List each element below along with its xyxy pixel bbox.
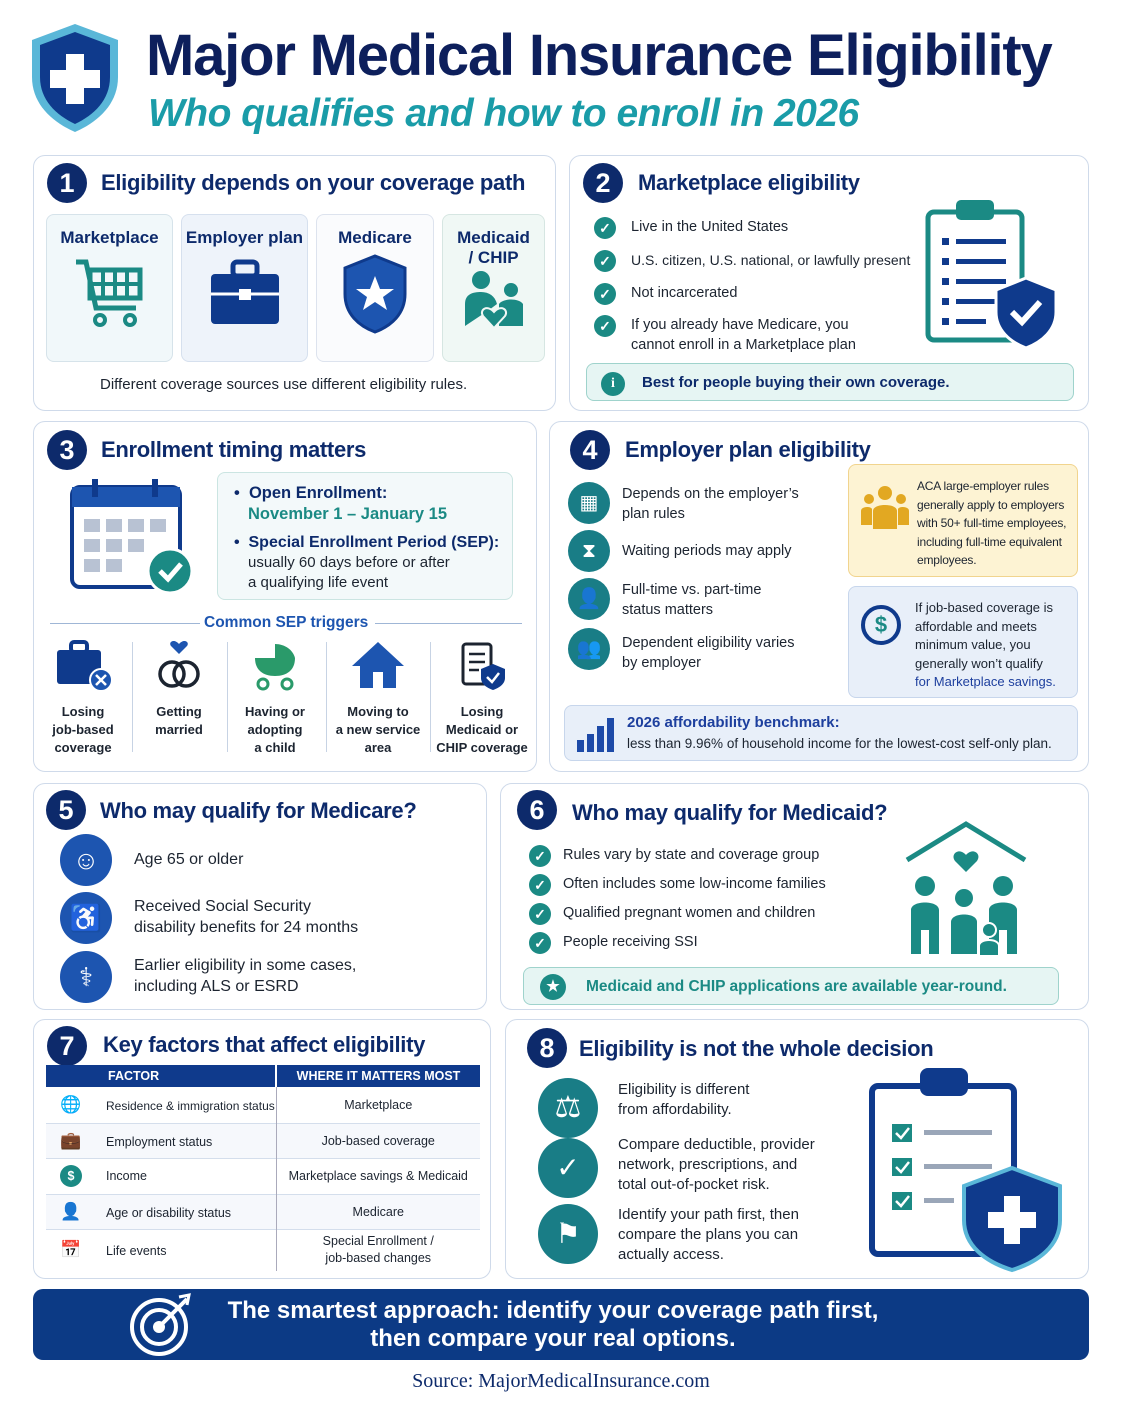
decision list: total out-of-pocket risk. <box>618 1176 770 1193</box>
callout: ACA large-employer: with 50+ full-time employees, <box>917 516 1066 530</box>
medicare list: ☺ <box>73 845 99 875</box>
card: marketplace: Marketplace <box>60 228 159 247</box>
factors table: Income <box>106 1169 147 1183</box>
SEP triggers row: a child <box>254 740 296 755</box>
factors table: Special Enrollment / <box>323 1234 434 1248</box>
panel 5: Who may qualify for Medicare? <box>100 798 416 823</box>
medicaid checklist: ✓ <box>534 848 546 864</box>
SEP triggers row: adopting <box>248 722 302 737</box>
benchmark callout <box>564 705 1078 761</box>
callout: job-based affordable: If job-based coverage is <box>915 600 1053 615</box>
decision list: compare the plans you can <box>618 1226 798 1243</box>
SEP triggers row: Losing <box>461 704 503 719</box>
panel 6 <box>500 783 1089 1010</box>
panel 8: Eligibility is not the whole decision <box>579 1036 933 1061</box>
icon: clipboard checklist shield <box>869 1068 1062 1272</box>
callout: ACA large-employer: employees. <box>917 553 976 567</box>
enrollment periods box <box>217 472 513 600</box>
enrollment periods box: usually 60 days before or after <box>248 554 450 571</box>
SEP triggers row: Having or <box>245 704 305 719</box>
decision list: Identify your path first, then <box>618 1206 799 1223</box>
factors table: Age or disability status <box>106 1206 231 1220</box>
callout: job-based affordable: affordable and meets <box>915 618 1037 634</box>
card: medicare <box>316 214 434 362</box>
icon: calendar <box>70 479 190 592</box>
medicare list: ⚕ <box>79 962 93 992</box>
panel 5: 5 <box>58 795 74 825</box>
benchmark callout: less than 9.96% of household income for the lowest-cost self-only plan. <box>627 736 1052 751</box>
medicare list: Earlier eligibility in some cases, <box>134 957 356 974</box>
decision list: ⚖ <box>555 1091 581 1124</box>
icon: clipboard shield <box>926 200 1054 346</box>
SEP triggers row: Moving to <box>347 704 409 719</box>
medicare list: Age 65 or older <box>134 851 243 868</box>
factors table <box>46 1065 480 1271</box>
panel 7: 7 <box>59 1031 75 1061</box>
factors table: Residence & immigration status <box>106 1099 275 1113</box>
medicaid checklist: ✓ <box>534 906 546 922</box>
factors table: WHERE IT MATTERS MOST <box>297 1069 460 1083</box>
SEP triggers row: CHIP coverage <box>436 740 528 755</box>
medicaid checklist: ✓ <box>534 935 546 951</box>
panel 4 <box>549 421 1089 772</box>
employer rules list: 👥 <box>577 638 601 660</box>
callout: ACA large-employer: including full-time equivalent <box>917 534 1062 548</box>
checklist: ✓ <box>599 318 611 334</box>
employer rules list: Waiting periods may apply <box>622 543 792 559</box>
employer rules list: Dependent eligibility varies <box>622 635 794 651</box>
callout: year-round: Medicaid and CHIP applications are available year-round. <box>586 978 1007 995</box>
callout: ACA large-employer <box>848 464 1078 577</box>
decision list: Eligibility is different <box>618 1081 749 1098</box>
callout: year-round <box>523 967 1059 1005</box>
caption: Different coverage sources use different eligibility rules. <box>100 376 467 393</box>
decision list: network, prescriptions, and <box>618 1156 797 1173</box>
panel 6: Who may qualify for Medicaid? <box>572 800 887 825</box>
banner: smartest approach: then compare your real options. <box>370 1325 736 1352</box>
callout <box>586 363 1074 401</box>
medicaid checklist <box>529 845 826 954</box>
SEP triggers row: coverage <box>54 740 112 755</box>
callout: year-round: ★ <box>546 978 560 995</box>
factors table: 💼 <box>60 1130 81 1150</box>
decision list: Compare deductible, provider <box>618 1136 815 1153</box>
card: medicare: Medicare <box>338 228 412 247</box>
checklist <box>594 217 910 353</box>
card: marketplace <box>46 214 173 362</box>
medicare list: disability benefits for 24 months <box>134 919 358 936</box>
panel 1 <box>33 155 556 411</box>
icon: family house <box>906 821 1026 955</box>
callout: Best for people buying their own coverage. <box>642 374 950 391</box>
SEP triggers row: Losing <box>62 704 104 719</box>
callout: ACA large-employer: generally apply to employers <box>917 498 1064 512</box>
panel 5 <box>33 783 487 1010</box>
factors table: job-based changes <box>325 1251 431 1265</box>
checklist: ✓ <box>599 220 611 236</box>
checklist: ✓ <box>599 286 611 302</box>
panel 7 <box>33 1019 491 1279</box>
employer rules list: Full-time vs. part-time <box>622 582 761 598</box>
callout: job-based affordable: $ <box>875 612 887 637</box>
callout: i <box>611 376 615 391</box>
medicare list: Received Social Security <box>134 898 311 915</box>
medicaid checklist: Rules vary by state and coverage group <box>563 847 819 863</box>
SEP triggers row: area <box>365 740 391 755</box>
panel 2: Marketplace eligibility <box>638 170 860 195</box>
title: Major Medical Insurance Eligibility <box>146 23 1052 88</box>
employer rules list: ⧗ <box>582 540 596 562</box>
checklist: ✓ <box>599 253 611 269</box>
panel 2 <box>569 155 1089 411</box>
card: employer plan: Employer plan <box>186 228 303 247</box>
SEP triggers row: job-based <box>52 722 114 737</box>
checklist: If you already have Medicare, you <box>631 317 849 333</box>
panel 4: Employer plan eligibility <box>625 437 871 462</box>
decision list: ⚑ <box>555 1218 581 1249</box>
panel 6: 6 <box>529 795 545 825</box>
panel 7: Key factors that affect eligibility <box>103 1032 425 1057</box>
medicare list: ♿ <box>70 903 102 933</box>
factors table: Life events <box>106 1244 166 1258</box>
panel 2: 2 <box>595 168 611 198</box>
medicaid checklist: Qualified pregnant women and children <box>563 905 815 921</box>
decision list: from affordability. <box>618 1101 732 1118</box>
factors table: 🌐 <box>60 1095 81 1114</box>
factors table: Marketplace savings & Medicaid <box>289 1169 468 1183</box>
decision list: ✓ <box>556 1152 580 1183</box>
factors table: Marketplace <box>344 1098 412 1112</box>
employer rules list: status matters <box>622 602 713 618</box>
employer rules list <box>568 482 799 671</box>
header shield logo <box>32 24 118 132</box>
enrollment periods box: • Special Enrollment Period (SEP): <box>234 534 499 551</box>
factors table: FACTOR <box>108 1069 159 1083</box>
decision list: actually access. <box>618 1246 724 1263</box>
checklist: Live in the United States <box>631 219 788 235</box>
factors table: $ <box>68 1169 74 1183</box>
checklist: U.S. citizen, U.S. national, or lawfully present <box>631 252 910 268</box>
callout: job-based affordable: for Marketplace savings. <box>915 674 1056 689</box>
banner: smartest approach <box>33 1289 1089 1360</box>
factors table: 👤 <box>60 1202 81 1220</box>
factors table: Job-based coverage <box>322 1134 435 1148</box>
medicare list <box>60 834 358 1003</box>
panel 3: Enrollment timing matters <box>101 437 366 462</box>
card: medicaid/chip: / CHIP <box>468 248 519 267</box>
panel 4: 4 <box>582 435 598 465</box>
enrollment periods box: a qualifying life event <box>248 574 388 591</box>
card: medicaid/chip <box>442 214 545 362</box>
callout: job-based affordable <box>848 586 1078 698</box>
subtitle: Who qualifies and how to enroll in 2026 <box>148 92 859 135</box>
card: medicaid/chip: Medicaid <box>457 228 530 247</box>
SEP triggers row: married <box>155 722 203 737</box>
panel 3: 3 <box>59 435 75 465</box>
SEP triggers row <box>52 640 528 755</box>
heading: common SEP triggers: Common SEP triggers <box>204 614 368 631</box>
medicaid checklist: Often includes some low-income families <box>563 876 826 892</box>
callout: ACA large-employer: ACA large-employer rules <box>917 479 1049 493</box>
panel 1: 1 <box>59 168 75 198</box>
medicaid checklist: People receiving SSI <box>563 934 698 950</box>
employer rules list: Depends on the employer’s <box>622 486 799 502</box>
medicare list: including ALS or ESRD <box>134 978 299 995</box>
source: Source: MajorMedicalInsurance.com <box>412 1370 710 1392</box>
panel 3 <box>33 421 537 772</box>
enrollment periods box: November 1 – January 15 <box>248 505 447 523</box>
card: employer plan <box>181 214 308 362</box>
employer rules list: by employer <box>622 655 701 671</box>
factors table: 📅 <box>60 1240 81 1259</box>
SEP triggers row: a new service <box>336 722 420 737</box>
checklist: cannot enroll in a Marketplace plan <box>631 337 856 353</box>
checklist: Not incarcerated <box>631 285 737 301</box>
factors table: Medicare <box>353 1204 404 1218</box>
banner: smartest approach: The smartest approach: identify your coverage path first, <box>228 1297 878 1324</box>
SEP triggers row: Medicaid or <box>446 722 518 737</box>
callout: job-based affordable: minimum value, you <box>915 637 1031 652</box>
employer rules list: 👤 <box>577 588 601 610</box>
panel 8: 8 <box>539 1033 555 1063</box>
panel 8 <box>505 1019 1089 1279</box>
SEP triggers row: Getting <box>156 704 202 719</box>
benchmark callout: 2026 affordability benchmark: <box>627 714 840 731</box>
employer rules list: ▦ <box>580 492 598 514</box>
medicaid checklist: ✓ <box>534 877 546 893</box>
decision list <box>538 1078 815 1264</box>
factors table: Employment status <box>106 1134 212 1148</box>
employer rules list: plan rules <box>622 506 685 522</box>
panel 1: Eligibility depends on your coverage path <box>101 170 525 195</box>
enrollment periods box: • Open Enrollment: <box>234 484 387 502</box>
callout: job-based affordable: generally won’t qualify <box>915 656 1043 670</box>
